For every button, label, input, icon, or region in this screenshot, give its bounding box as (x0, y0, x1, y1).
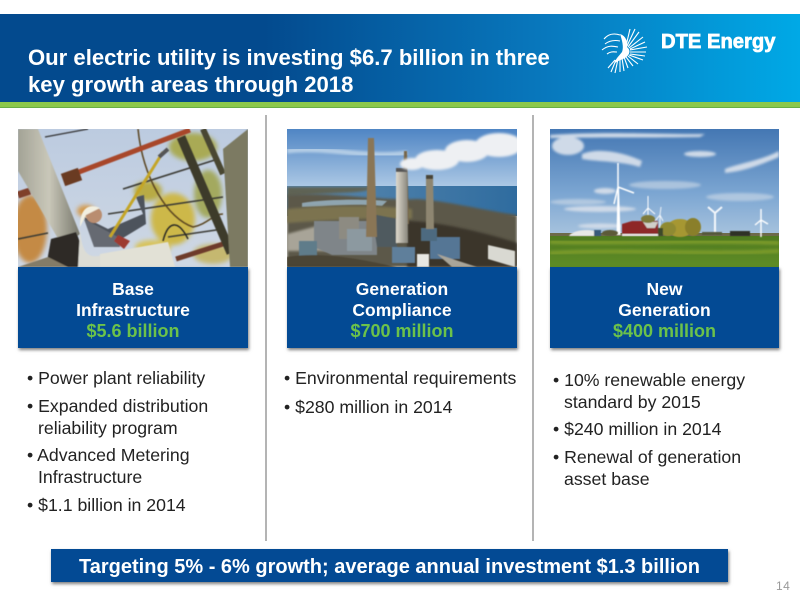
panel: new generation: • 10% renewable energy (553, 370, 745, 390)
label card: Generation (618, 300, 711, 320)
header gradient band (0, 14, 800, 102)
label card (18, 267, 248, 348)
panel: base infrastructure: • Power plant reliability (27, 368, 205, 388)
panel: generation compliance: • Environmental requirements (284, 368, 516, 388)
photo: lineman on bucket truck (18, 129, 248, 267)
label card: Base (112, 279, 154, 299)
panel: new generation: • $240 million in 2014 (553, 419, 721, 439)
header banner (0, 14, 800, 108)
panel: base infrastructure: • $1.1 billion in 2014 (27, 495, 186, 515)
panel: new generation: • Renewal of generation (553, 447, 741, 467)
label card: $700 million (350, 321, 454, 341)
panel: base infrastructure (16, 129, 252, 515)
icon: sunburst (602, 28, 648, 74)
label card: Compliance (352, 300, 452, 320)
title: key growth areas through 2018 (28, 72, 353, 97)
callout: growth target: Targeting 5% - 6% growth; average annual investment $1.3 billion (79, 556, 700, 578)
bullet list (27, 368, 208, 515)
green rule (0, 102, 800, 108)
label card (287, 267, 517, 348)
label card: Generation (356, 279, 448, 299)
photo: wind farm (550, 129, 779, 267)
panel: generation compliance: • $280 million in 2014 (284, 397, 452, 417)
panel: base infrastructure: reliability program (38, 418, 178, 438)
panel: new generation (548, 129, 782, 489)
panel: base infrastructure: • Expanded distribution (27, 396, 208, 416)
bullet list (284, 368, 516, 417)
label card: $5.6 billion (86, 321, 180, 341)
panel: new generation: asset base (564, 469, 650, 489)
callout: growth target (51, 549, 728, 582)
label card: New (646, 279, 682, 299)
label card: Infrastructure (76, 300, 190, 320)
panel: new generation: standard by 2015 (564, 392, 701, 412)
title (28, 45, 550, 97)
label card: $400 million (613, 321, 716, 341)
panel: base infrastructure: • Advanced Metering (27, 445, 190, 465)
page number: 14 (776, 579, 790, 593)
panel: generation compliance (284, 129, 520, 417)
title: Our electric utility is investing $6.7 billion in three (28, 45, 550, 70)
panel: base infrastructure: Infrastructure (38, 467, 142, 487)
bullet list (553, 370, 745, 489)
label card (550, 267, 779, 348)
column dividers (265, 115, 267, 541)
logo wordmark: DTE Energy (661, 31, 775, 53)
photo: power plant (287, 129, 517, 267)
DTE Energy logo (602, 28, 776, 74)
